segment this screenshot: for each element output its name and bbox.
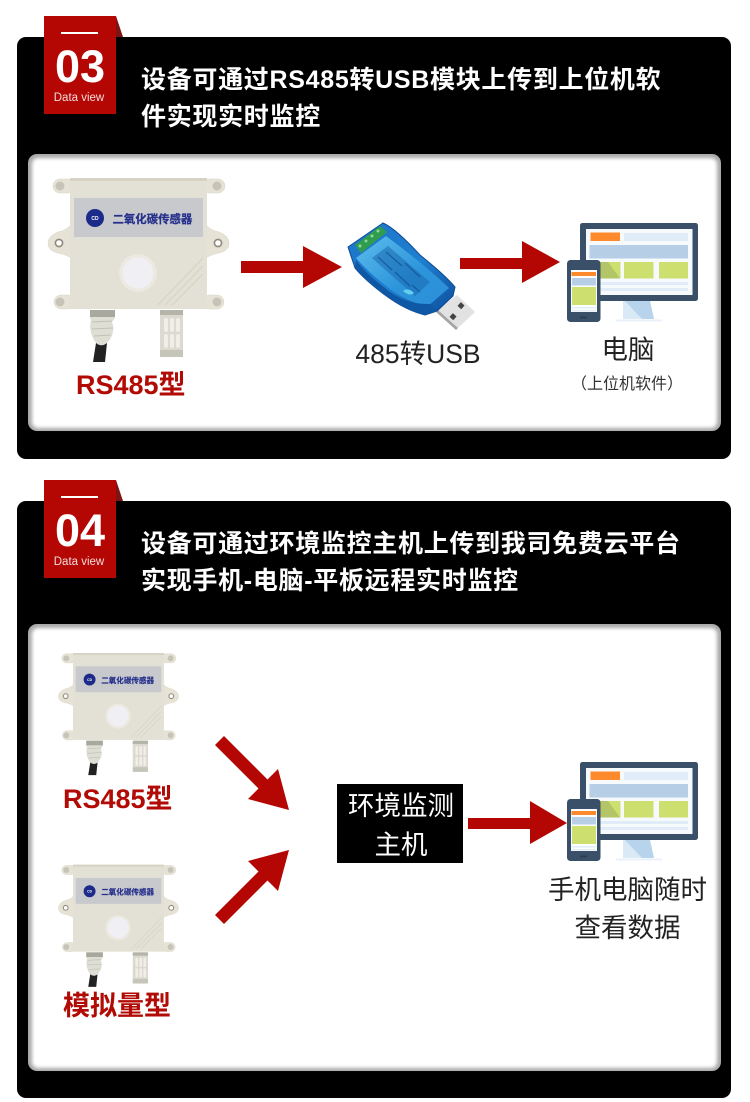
- arrow: sensor to converter: [241, 246, 342, 288]
- arrow: analog sensor to host: [215, 850, 289, 924]
- box: environment monitoring host: [337, 784, 463, 863]
- arrow: RS485 sensor to host: [215, 736, 289, 810]
- tag: 03: Data view: [54, 92, 105, 104]
- tag: 04: [44, 480, 123, 578]
- label: anytime viewing: 查看数据: [574, 913, 680, 943]
- panel: section 03: [17, 16, 731, 459]
- icon: sensor RS485 small: CD: [87, 678, 93, 682]
- icon: sensor analog small: [58, 865, 179, 987]
- heading: section 04: 设备可通过环境监控主机上传到我司免费云平台: [141, 529, 681, 558]
- label: computer: 电脑: [602, 335, 654, 365]
- icon: computer and phone: [567, 223, 698, 322]
- arrow: converter to computer: [460, 241, 560, 283]
- heading: section 04: 实现手机-电脑-平板远程实时监控: [141, 567, 519, 595]
- heading: section 03: 件实现实时监控: [141, 103, 321, 131]
- icon: sensor analog small: CD: [87, 890, 93, 894]
- label: RS485 type: RS485型: [76, 370, 186, 400]
- heading: section 03: 设备可通过RS485转USB模块上传到上位机软: [141, 65, 661, 94]
- icon: USB converter: [348, 223, 475, 330]
- icon: sensor RS485: CD: [91, 216, 99, 222]
- label: host software: （上位机软件）: [571, 375, 683, 393]
- arrow: host to computer: [468, 801, 567, 844]
- white content card 04: [28, 624, 721, 1071]
- panel: section 04: [17, 480, 731, 1098]
- icon: sensor analog small: 二氧化碳传感器: [101, 887, 154, 897]
- tag: 04: Data view: [54, 556, 105, 568]
- label: anytime viewing: 手机电脑随时: [548, 875, 707, 905]
- icon: computer and phone: [567, 762, 698, 861]
- label: analog type: 模拟量型: [63, 991, 171, 1021]
- icon: sensor RS485 small: 二氧化碳传感器: [101, 675, 154, 685]
- icon: sensor RS485 small: [58, 653, 179, 775]
- tag: 04: 04: [55, 505, 105, 556]
- icon: sensor RS485: 二氧化碳传感器: [112, 212, 193, 226]
- tag: 03: [44, 16, 123, 114]
- box: environment monitoring host: 环境监测: [348, 791, 454, 821]
- box: environment monitoring host: 主机: [374, 830, 428, 860]
- icon: sensor RS485: [48, 178, 229, 362]
- label: RS485 type: RS485型: [63, 784, 173, 814]
- label: anytime viewing: [548, 875, 707, 943]
- label: 485 to USB: 485转USB: [355, 339, 481, 369]
- tag: 03: 03: [55, 41, 105, 92]
- white content card 03: [28, 154, 721, 431]
